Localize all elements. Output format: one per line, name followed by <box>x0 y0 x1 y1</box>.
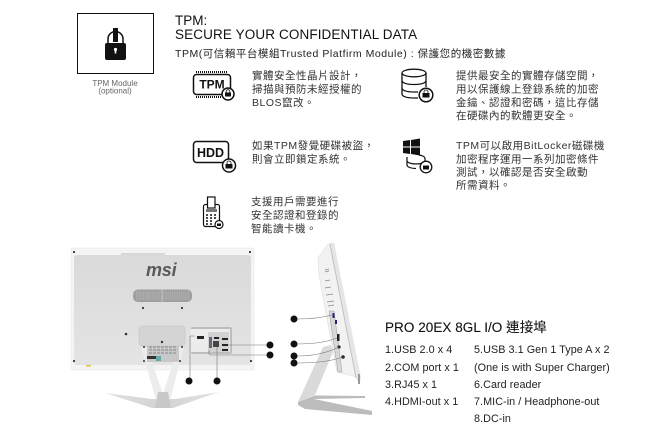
heading: TPM secure your confidential data: SECURE YOUR CONFIDENTIAL DATA <box>175 27 417 42</box>
monitor rear panel <box>74 255 251 365</box>
icon: TPM chip <box>194 72 234 100</box>
label plate <box>147 345 179 362</box>
heading: IO ports: PRO 20EX 8GL I/O 連接埠 <box>385 319 547 335</box>
text: BitLocker: 加密程序運用一系列加密條件 <box>456 152 599 166</box>
text: BitLocker: 測試，以確認是否安全啟動 <box>456 166 588 178</box>
ports list right: (One is with Super Charger) <box>474 362 610 374</box>
text: chip security: BLOS竄改。 <box>252 96 315 109</box>
side stand arm <box>298 345 333 402</box>
screws <box>73 251 252 362</box>
text: storage security: 用以保護線上登錄系統的加密 <box>456 82 599 96</box>
text: chip security: 掃描與預防未經授權的 <box>252 82 362 96</box>
io panel <box>191 327 232 354</box>
side base <box>298 396 372 415</box>
text: smart card reader: 智能讀卡機。 <box>251 222 317 235</box>
ports list left: 4.HDMI-out x 1 <box>385 396 458 408</box>
monitor outer shell <box>71 248 254 370</box>
text: BitLocker: TPM可以啟用BitLocker磁碟機 <box>456 140 605 152</box>
vent <box>133 290 192 302</box>
callout badges 1-4 <box>186 342 274 384</box>
text: storage security: 提供最安全的實體存儲空間， <box>456 70 599 82</box>
ports list right: 7.MIC-in / Headphone-out <box>474 396 599 408</box>
side monitor <box>318 243 357 377</box>
brand: msi: msi <box>146 260 178 280</box>
side ports <box>329 311 342 372</box>
text: smart card reader: 支援用戶需要進行 <box>251 196 339 208</box>
callout lines <box>297 315 343 363</box>
icon: TPM chip: TPM <box>199 78 225 92</box>
product photo: side view <box>290 243 372 415</box>
icon: smart card reader <box>204 197 223 228</box>
ventilation <box>325 269 334 306</box>
ports list left: 2.COM port x 1 <box>385 362 459 374</box>
callout badges 5-8 <box>290 316 298 366</box>
heading: TPM secure your confidential data: TPM: <box>175 13 207 28</box>
text: HDD lock: 則會立即鎖定系統。 <box>252 152 351 166</box>
icon: windows database lock <box>403 138 432 173</box>
stand neck <box>139 326 185 346</box>
ports list right: 6.Card reader <box>474 379 542 391</box>
ports list left: 1.USB 2.0 x 4 <box>385 344 452 356</box>
text: storage security: 在硬碟內的軟體更安全。 <box>456 109 577 122</box>
ports list right: 5.USB 3.1 Gen 1 Type A x 2 <box>474 344 610 356</box>
caption: TPM module optional: (optional) <box>98 86 132 96</box>
ports list right: 8.DC-in <box>474 413 511 425</box>
text: smart card reader: 安全認證和登錄的 <box>251 208 339 222</box>
icon: HDD lock <box>194 142 236 172</box>
caption: TPM module optional: TPM Module <box>92 79 138 88</box>
back stand foot <box>105 392 219 408</box>
icon: TPM module lock <box>78 14 154 74</box>
text: HDD lock: 如果TPM發覺硬碟被盜， <box>252 140 375 152</box>
product photo: back view <box>71 248 274 408</box>
stand arms <box>141 347 184 400</box>
subheading: TPM description: TPM(可信賴平台模組Trusted Platfirm Module) : 保護您的機密數據 <box>175 47 506 60</box>
ports list left: 3.RJ45 x 1 <box>385 379 437 391</box>
text: BitLocker: 所需資料。 <box>456 178 511 192</box>
text: chip security: 實體安全性晶片設計， <box>252 70 362 82</box>
icon: HDD lock: HDD <box>197 146 224 160</box>
callout lines <box>190 336 267 378</box>
text: storage security: 金鑰、認證和密碼，這比存儲 <box>456 96 599 109</box>
icon: database lock <box>402 69 433 102</box>
